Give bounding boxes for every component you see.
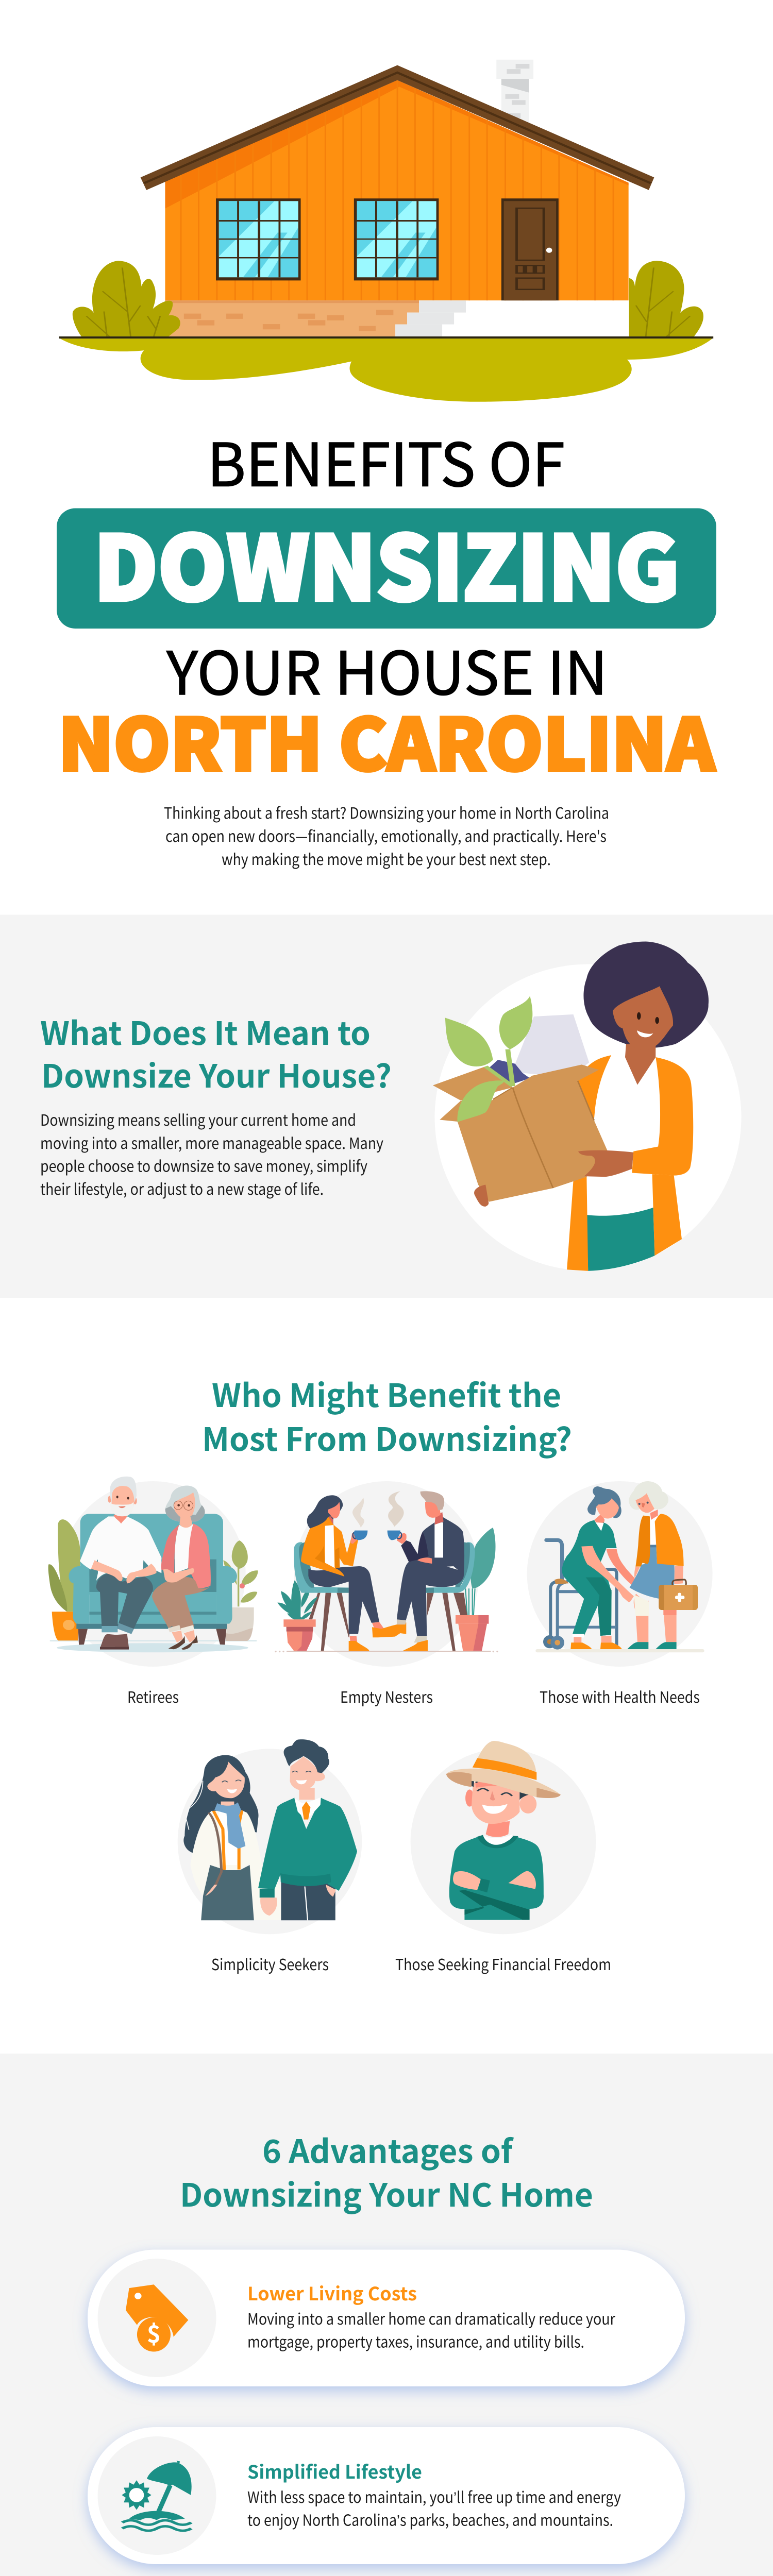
intro text: can open new doors—financially, emotionally, and practically. Here's (165, 824, 607, 846)
bush left (73, 261, 180, 336)
windows (216, 198, 439, 280)
card text (247, 2279, 615, 2352)
illustration: orange house (59, 60, 713, 402)
title banner: DOWNSIZING (94, 497, 680, 626)
bush right (629, 261, 703, 336)
foundation and steps (165, 300, 466, 336)
illustration: financial freedom seeker (411, 1741, 596, 1934)
house wall (165, 80, 629, 300)
ground line (59, 336, 713, 338)
heading: What Does It Mean to (40, 1008, 371, 1054)
heading: 6 Advantages of (262, 2126, 514, 2172)
body text: their lifestyle, or adjust to a new stage of life. (40, 1177, 324, 1199)
panel: six advantages (0, 2054, 773, 2576)
icon: beach umbrella (122, 2461, 192, 2531)
card: lower living costs (88, 2249, 685, 2386)
label: retirees: Retirees (127, 1685, 179, 1707)
card text: to enjoy North Carolina’s parks, beaches, and mountains. (247, 2508, 613, 2531)
icon: price tag with coin: $ (147, 2316, 161, 2350)
intro text (164, 801, 609, 870)
door (501, 198, 559, 300)
heading (40, 1008, 392, 1097)
heading (180, 2126, 593, 2216)
title (57, 418, 716, 791)
illustration: woman carrying moving box (433, 942, 709, 1271)
body text (40, 1108, 383, 1199)
panel: who might benefit (48, 1370, 713, 1975)
roof (141, 65, 654, 190)
illustration: simplicity seekers (178, 1739, 362, 1934)
heading (202, 1370, 572, 1460)
circle backdrop (435, 964, 741, 1270)
title line: North Carolina: NORTH CAROLINA (58, 688, 716, 791)
heading: Downsize Your House? (41, 1050, 392, 1097)
body text: moving into a smaller, more manageable space. Many (40, 1131, 383, 1154)
chimney (496, 60, 533, 124)
heading: Downsizing Your NC Home (180, 2170, 593, 2216)
heading: Who Might Benefit the (212, 1370, 561, 1416)
card text: Moving into a smaller home can dramatically reduce your (247, 2307, 615, 2329)
body text: Downsizing means selling your current home and (40, 1108, 356, 1130)
ground (60, 338, 712, 402)
heading: Most From Downsizing? (202, 1414, 572, 1460)
card text: Simplified Lifestyle (247, 2458, 422, 2484)
label: financial freedom: Those Seeking Financial Freedom (395, 1952, 611, 1975)
card: simplified lifestyle (88, 2427, 685, 2564)
card text: mortgage, property taxes, insurance, and utility bills. (247, 2330, 584, 2352)
label: health needs: Those with Health Needs (540, 1685, 700, 1707)
card text: Lower Living Costs (247, 2279, 417, 2306)
card text (247, 2458, 621, 2531)
label: simplicity seekers: Simplicity Seekers (211, 1952, 329, 1975)
illustration: empty nesters (275, 1481, 498, 1667)
intro text: why making the move might be your best next step. (222, 847, 551, 870)
illustration: retirees (48, 1477, 258, 1667)
card text: With less space to maintain, you’ll free up time and energy (247, 2485, 621, 2507)
body text: people choose to downsize to save money, simplify (40, 1154, 367, 1177)
title line: Benefits of: BENEFITS OF (207, 418, 565, 504)
panel: what does it mean (0, 915, 773, 1298)
intro text: Thinking about a fresh start? Downsizing your home in North Carolina (164, 801, 609, 823)
title line: your house in: YOUR HOUSE IN (166, 626, 608, 712)
icon: price tag with coin (126, 2284, 188, 2351)
illustration: health needs (527, 1481, 713, 1667)
label: empty nesters: Empty Nesters (340, 1685, 433, 1707)
